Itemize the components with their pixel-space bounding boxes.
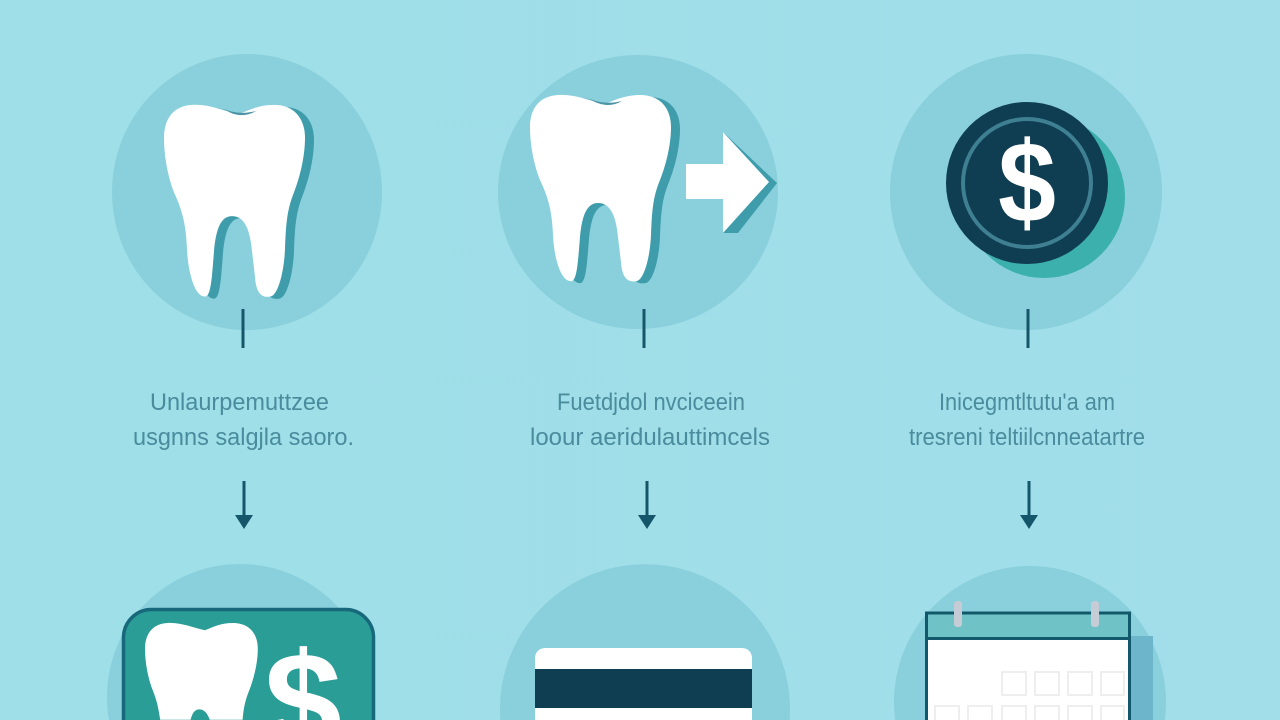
arrow: down 1 [235,481,253,529]
icon: credit card [535,648,752,720]
connector line 3 [1026,309,1030,348]
background circle [498,55,778,329]
icon: dollar coin [946,102,1125,278]
icon: tooth [164,105,314,299]
text block: caption 3: Inicegmtltutu'a am [939,389,1115,416]
text block: caption 3: tresreni teltiilcnneatartre [909,424,1145,451]
panel: payment card [500,564,790,720]
panel: tooth with arrow icon [498,55,778,329]
background circle [500,564,790,720]
icon: tooth [530,95,680,283]
panel: tooth icon [112,54,382,330]
background circle [107,564,373,720]
panel: tooth price card [107,564,373,720]
icon: card with tooth and dollar [124,610,374,720]
connector line 1 [242,309,244,348]
background circle [112,54,382,330]
text block: caption 1 [133,389,354,451]
arrow: down 2 [638,481,656,529]
panel: calendar [894,566,1166,720]
text block: caption 2: loour aeridulauttimcels [530,424,770,451]
arrow: down 3 [1020,481,1038,529]
icon: dollar coin: $ [998,119,1056,247]
background circle [894,566,1166,720]
icon: right arrow [686,132,777,233]
text block: caption 2 [530,389,770,451]
text block: caption 3 [909,389,1145,451]
text block: caption 2: Fuetdjdol nvciceein [557,389,745,416]
connector line 2 [642,309,646,348]
panel: coin icon [890,54,1162,330]
text block: caption 1: Unlaurpemuttzee [150,389,329,416]
text block: caption 1: usgnns salgjla saoro. [133,424,354,451]
background circle [890,54,1162,330]
icon: calendar [926,601,1153,720]
